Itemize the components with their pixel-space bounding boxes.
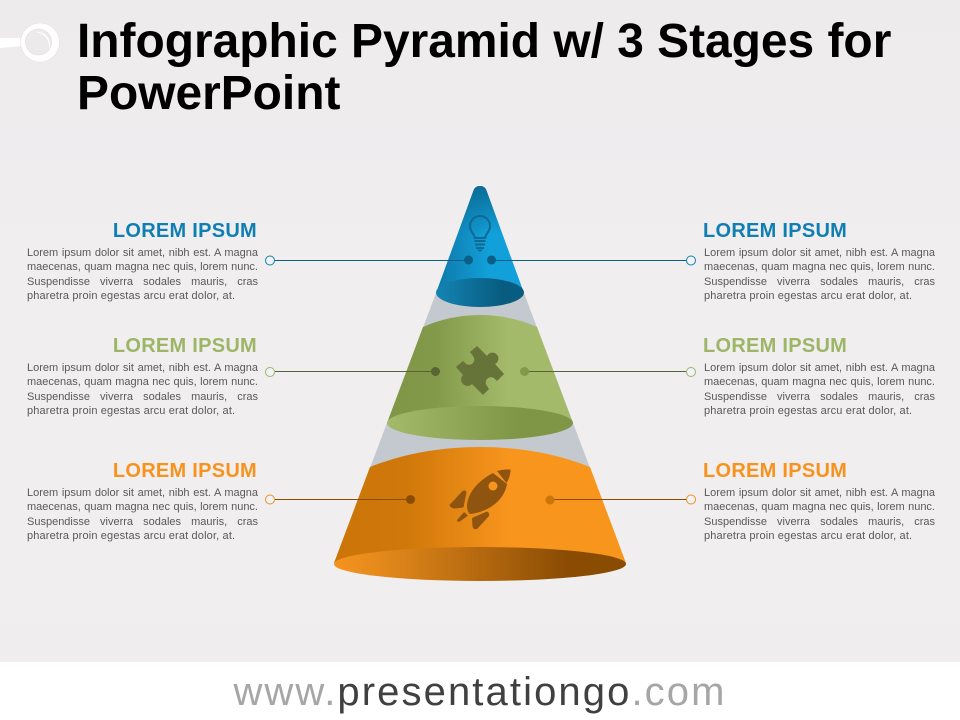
text: orange right: Suspendisse viverra sodales mauris, cras [704, 516, 935, 528]
text: orange left: Suspendisse viverra sodales mauris, cras [27, 516, 258, 528]
text: blue right: Suspendisse viverra sodales mauris, cras [704, 276, 935, 288]
text: blue left: maecenas, quam magna nec quis, lorem nunc. [27, 261, 258, 273]
text: green right: Lorem ipsum dolor sit amet, nibh est. A magna [704, 362, 935, 374]
footer url: www.presentationgo.com [233, 670, 727, 714]
connector: green right [520, 367, 696, 376]
icon: puzzle piece [456, 346, 504, 395]
grey cone backing [370, 293, 590, 468]
title: Infographic Pyramid w/ 3 Stages for [77, 15, 891, 68]
text: green left: maecenas, quam magna nec quis, lorem nunc. [27, 376, 258, 388]
text: green left [27, 362, 258, 417]
text: green right [704, 362, 935, 417]
heading: blue right: LOREM IPSUM [703, 220, 847, 242]
heading: green right: LOREM IPSUM [703, 335, 847, 357]
text: green left: Lorem ipsum dolor sit amet, nibh est. A magna [27, 362, 258, 374]
text: orange left: pharetra proin egestas arcu erat dolor, at. [27, 530, 235, 542]
text: blue left [27, 247, 258, 302]
text: green left: Suspendisse viverra sodales mauris, cras [27, 391, 258, 403]
connector: orange right [546, 495, 696, 504]
text: blue right: maecenas, quam magna nec quis, lorem nunc. [704, 261, 935, 273]
text: green left: pharetra proin egestas arcu erat dolor, at. [27, 405, 235, 417]
blue stage [436, 186, 524, 307]
text: blue right: pharetra proin egestas arcu erat dolor, at. [704, 290, 912, 302]
title: PowerPoint [77, 67, 340, 120]
text: orange right [704, 487, 935, 542]
heading: green left: LOREM IPSUM [113, 335, 257, 357]
connector: blue left [266, 256, 473, 265]
text: blue left: Lorem ipsum dolor sit amet, nibh est. A magna [27, 247, 258, 259]
text: green right: maecenas, quam magna nec quis, lorem nunc. [704, 376, 935, 388]
text: orange left: maecenas, quam magna nec quis, lorem nunc. [27, 501, 258, 513]
heading: orange left: LOREM IPSUM [113, 460, 257, 482]
orange stage [334, 447, 626, 581]
connector: orange left [266, 495, 415, 504]
text: blue left: pharetra proin egestas arcu erat dolor, at. [27, 290, 235, 302]
text: orange left: Lorem ipsum dolor sit amet, nibh est. A magna [27, 487, 258, 499]
text: blue left: Suspendisse viverra sodales mauris, cras [27, 276, 258, 288]
text: blue right [704, 247, 935, 302]
icon: light bulb [470, 216, 490, 252]
heading: blue left: LOREM IPSUM [113, 220, 257, 242]
connector: green left [266, 367, 440, 376]
icon: rocket [450, 470, 510, 529]
green stage [387, 315, 573, 440]
text: orange right: Lorem ipsum dolor sit amet, nibh est. A magna [704, 487, 935, 499]
text: blue right: Lorem ipsum dolor sit amet, nibh est. A magna [704, 247, 935, 259]
logo ring [0, 23, 60, 62]
title [77, 15, 891, 120]
text: orange left [27, 487, 258, 542]
heading: orange right: LOREM IPSUM [703, 460, 847, 482]
text: orange right: maecenas, quam magna nec quis, lorem nunc. [704, 501, 935, 513]
footer band [0, 662, 960, 720]
text: orange right: pharetra proin egestas arcu erat dolor, at. [704, 530, 912, 542]
text: green right: pharetra proin egestas arcu erat dolor, at. [704, 405, 912, 417]
text: green right: Suspendisse viverra sodales mauris, cras [704, 391, 935, 403]
connector: blue right [487, 256, 696, 265]
